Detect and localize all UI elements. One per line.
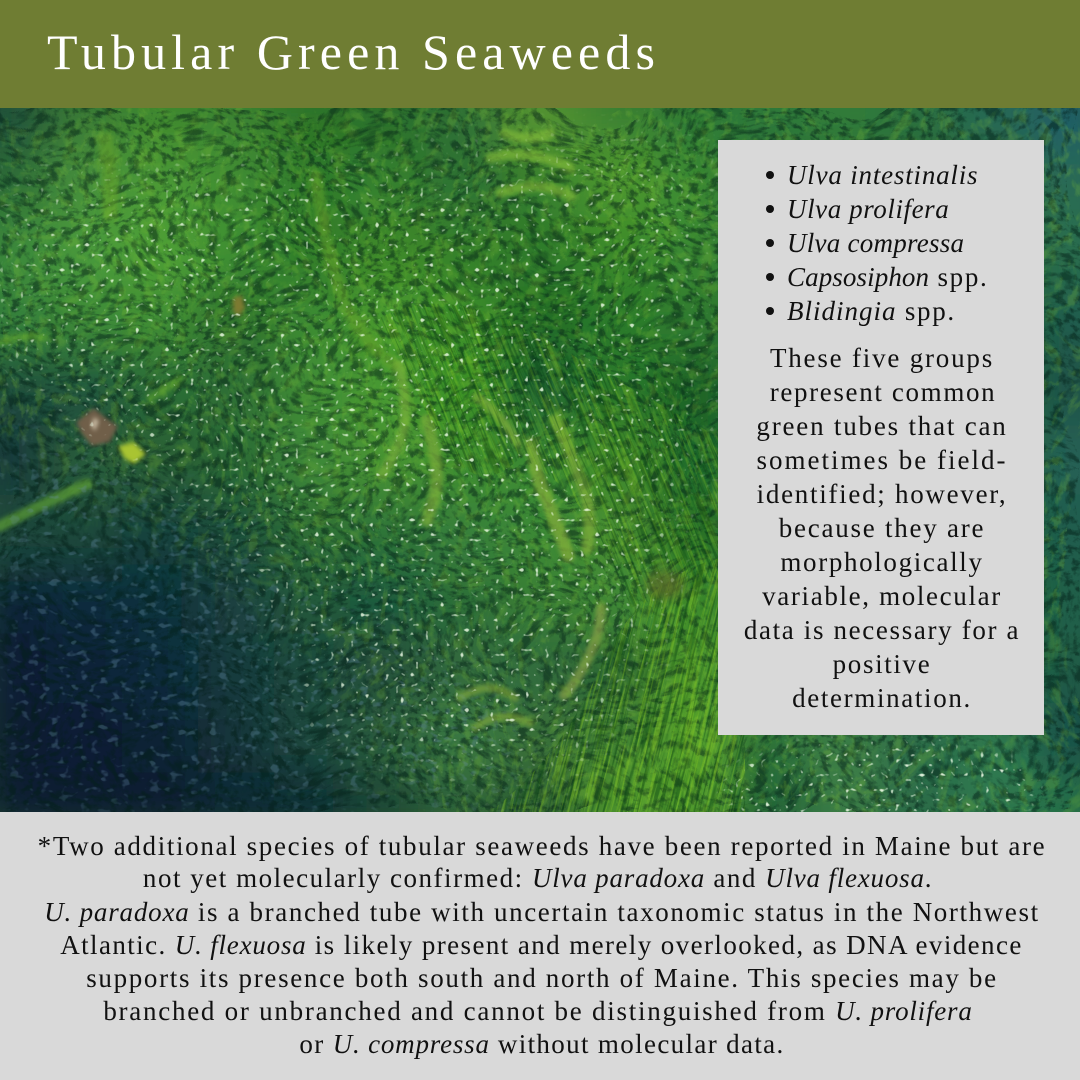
footnote text: *Two additional species of tubular seaweeds have been reported in Maine but are <box>38 831 1046 861</box>
footnote text: branched or unbranched and cannot be distinguished from U. prolifera <box>103 996 973 1026</box>
species list <box>766 160 988 326</box>
flowing strands in lower right stream <box>494 558 745 812</box>
footnote text: or U. compressa without molecular data. <box>299 1029 785 1059</box>
description text: identified; however, <box>757 479 1007 509</box>
title: Tubular Green Seaweeds <box>47 24 660 80</box>
photo: green seaweed in water <box>0 108 1080 812</box>
brown seaweed fragment and highlights <box>76 295 685 600</box>
dark seaweed texture <box>0 108 1080 812</box>
flowing strands in centre <box>380 304 718 608</box>
footnote panel <box>0 812 1080 1080</box>
description text: determination. <box>792 683 972 713</box>
description text: positive <box>833 649 931 679</box>
species list: Ulva prolifera <box>787 194 949 224</box>
footnote text: Atlantic. U. flexuosa is likely present and merely overlooked, as DNA evidence <box>60 930 1023 960</box>
species list: Ulva compressa <box>787 228 964 258</box>
water ripples lower left <box>0 408 538 812</box>
description text: because they are <box>779 513 985 543</box>
species list: Capsosiphon spp. <box>787 262 988 292</box>
low-resolution colour map of the photo <box>0 78 1080 843</box>
description text: These five groups <box>770 343 994 373</box>
species list: Blidingia spp. <box>787 296 956 326</box>
footnote text: supports its presence both south and north of Maine. This species may be <box>86 963 998 993</box>
description text: data is necessary for a <box>744 615 1020 645</box>
description text <box>744 343 1020 713</box>
footnote text: not yet molecularly confirmed: Ulva paradoxa and Ulva flexuosa. <box>143 863 933 893</box>
footnote text: U. paradoxa is a branched tube with uncertain taxonomic status in the Northwest <box>44 897 1040 927</box>
description text: represent common <box>770 377 996 407</box>
light seaweed texture <box>0 108 1080 812</box>
description text: sometimes be field- <box>757 445 1007 475</box>
footnote text <box>38 831 1046 1059</box>
header band <box>0 0 1080 108</box>
bright fronds <box>0 133 601 728</box>
description text: green tubes that can <box>756 411 1008 441</box>
description text: variable, molecular <box>762 581 1002 611</box>
sun glints on the water <box>0 108 1080 812</box>
base colour field <box>0 108 1080 812</box>
species info panel <box>718 140 1044 735</box>
description text: morphologically <box>780 547 984 577</box>
species list: Ulva intestinalis <box>787 160 978 190</box>
